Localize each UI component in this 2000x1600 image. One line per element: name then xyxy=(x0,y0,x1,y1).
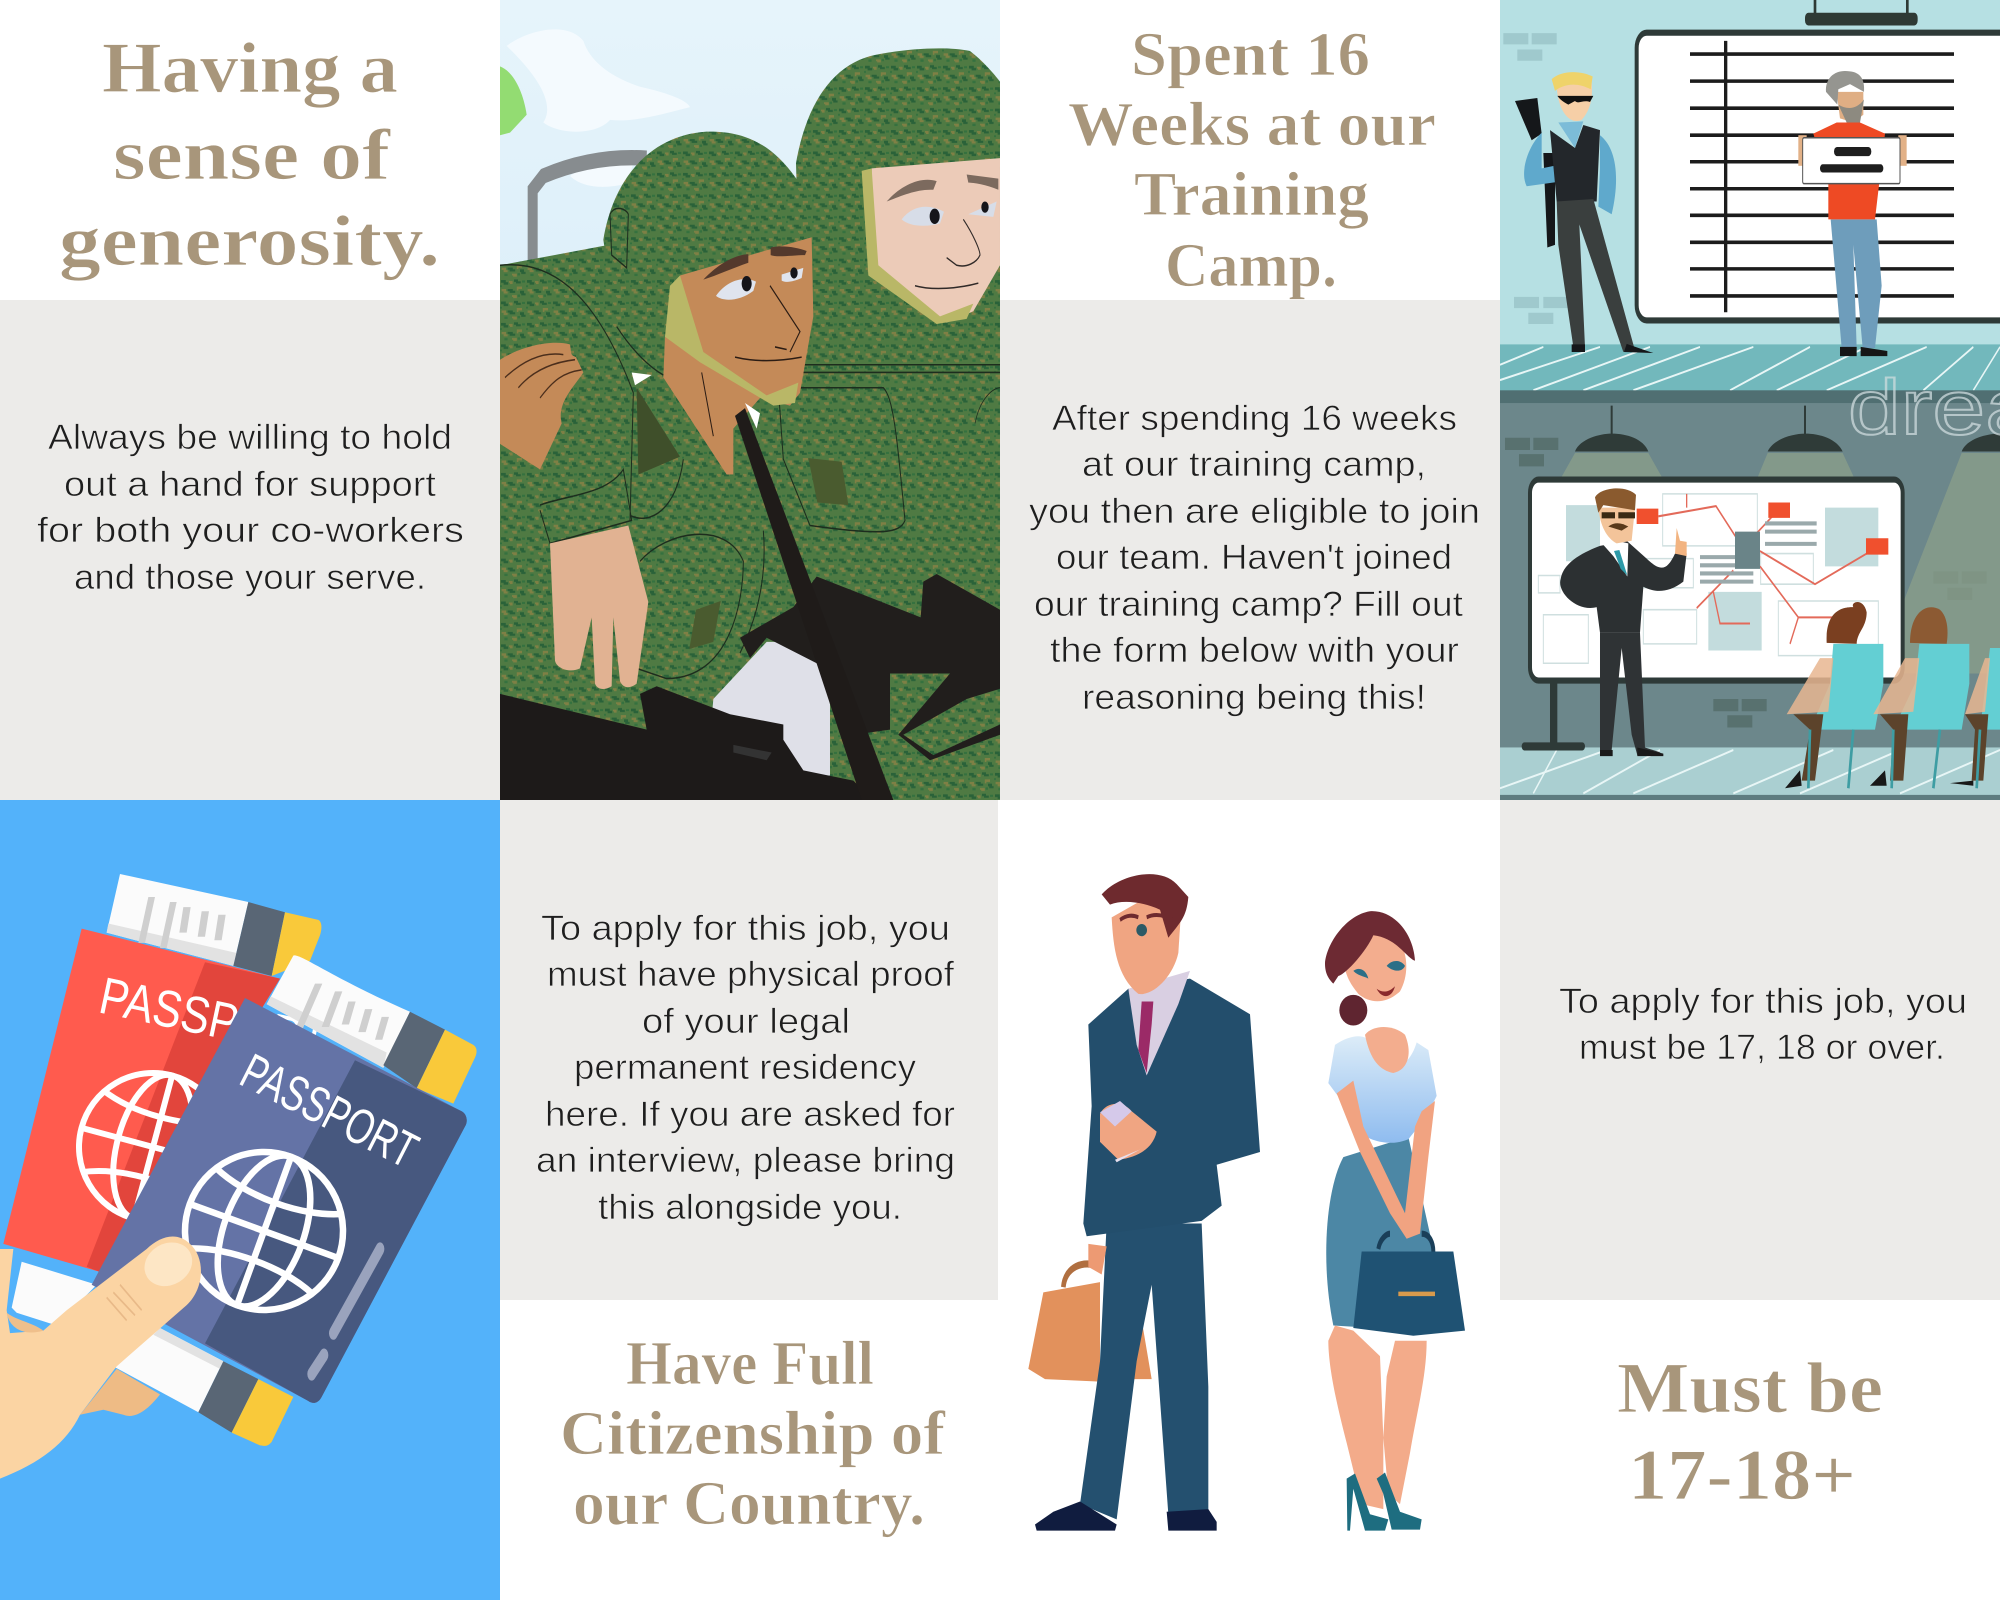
globe on blue passport xyxy=(182,1148,346,1314)
rear soldier xyxy=(733,48,1000,800)
passport label: blue: PASSPORT xyxy=(232,1043,427,1179)
body text: age requirement: To apply for this job, you xyxy=(1559,982,1967,1021)
body text: training camp eligibility: After spending 16 weeks xyxy=(1052,399,1457,438)
heading: must be 17-18+: 17-18+ xyxy=(1628,1435,1856,1515)
audience in chairs xyxy=(1785,602,2000,788)
heading: having a sense of generosity: sense of xyxy=(113,115,391,195)
globe on red passport xyxy=(76,1070,198,1220)
heading: have full citizenship of our country: Have Full xyxy=(626,1330,874,1398)
heading: must be 17-18+: Must be xyxy=(1617,1348,1883,1428)
heading: spent 16 weeks at our training camp: Spent 16 xyxy=(1131,21,1370,89)
stock watermark: drea xyxy=(1848,363,2000,451)
back passport and ticket xyxy=(3,874,332,1326)
presenter xyxy=(1560,488,1687,756)
body text: training camp eligibility: the form below with your xyxy=(1050,631,1459,670)
guard xyxy=(1515,72,1653,353)
illustration: two soldiers in camouflage xyxy=(500,0,1000,800)
body text: training camp eligibility: our training camp? Fill out xyxy=(1034,585,1463,624)
heading: spent 16 weeks at our training camp: Training xyxy=(1134,161,1369,229)
lower scene: briefing room xyxy=(1500,390,2000,800)
body text: training camp eligibility: our team. Haven't joined xyxy=(1056,538,1452,577)
heading: must be 17-18+ xyxy=(1617,1348,1883,1515)
front soldier xyxy=(500,132,814,730)
body text: age requirement: must be 17, 18 or over. xyxy=(1579,1028,1945,1067)
body text: proof of permanent residency: of your legal xyxy=(642,1002,850,1041)
body text: proof of permanent residency: To apply for this job, you xyxy=(541,909,950,948)
illustration: hand holding two passports xyxy=(0,800,500,1600)
panel: sense of generosity xyxy=(0,0,500,800)
body text: training camp eligibility: at our training camp, xyxy=(1082,445,1426,484)
rifles and sling xyxy=(500,408,1000,800)
body text: proof of permanent residency: must have physical proof xyxy=(547,955,954,994)
heading: having a sense of generosity: generosity. xyxy=(59,201,440,281)
hand xyxy=(0,1236,201,1479)
body text: training camp eligibility: reasoning being this! xyxy=(1082,678,1426,717)
businessman xyxy=(1028,874,1260,1531)
body text: willing to hold out a hand: out a hand for support xyxy=(64,465,436,504)
heading: having a sense of generosity: Having a xyxy=(102,28,398,108)
panel: spent 16 weeks at training camp xyxy=(1000,0,1500,800)
body text: proof of permanent residency: this alongside you. xyxy=(598,1188,902,1227)
heading: spent 16 weeks at our training camp: Camp. xyxy=(1165,232,1337,300)
body text: proof of permanent residency: here. If you are asked for xyxy=(545,1095,955,1134)
heading: spent 16 weeks at our training camp xyxy=(1068,21,1436,300)
heading: spent 16 weeks at our training camp: Weeks at our xyxy=(1068,91,1436,159)
heading: having a sense of generosity xyxy=(59,28,440,281)
heading: have full citizenship of our country xyxy=(560,1330,946,1538)
body text: training camp eligibility xyxy=(1029,399,1480,717)
body text: willing to hold out a hand: for both your co-workers xyxy=(37,511,464,550)
illustration: businessman and businesswoman xyxy=(1028,874,1465,1531)
body text: willing to hold out a hand: and those your serve. xyxy=(74,558,426,597)
illustration: police lineup and briefing room xyxy=(1500,0,2000,800)
body text: age requirement xyxy=(1559,982,1967,1067)
panel: must be 17-18+ xyxy=(1500,800,2000,1600)
prisoner xyxy=(1798,71,1907,356)
panel: full citizenship xyxy=(500,800,1000,1600)
front passport and ticket xyxy=(92,955,477,1446)
heading: have full citizenship of our country: our Country. xyxy=(573,1470,925,1538)
businesswoman xyxy=(1325,911,1465,1531)
body text: proof of permanent residency: an interview, please bring xyxy=(536,1141,955,1180)
body text: proof of permanent residency xyxy=(536,909,955,1227)
upper scene: lineup room xyxy=(1500,0,2000,391)
passport label: red: PASSPORT xyxy=(95,967,332,1072)
body text: willing to hold out a hand: Always be willing to hold xyxy=(48,418,452,457)
body text: proof of permanent residency: permanent residency xyxy=(574,1048,917,1087)
body text: willing to hold out a hand xyxy=(37,418,464,597)
heading: have full citizenship of our country: Citizenship of xyxy=(560,1400,946,1468)
body text: training camp eligibility: you then are eligible to join xyxy=(1029,492,1480,531)
